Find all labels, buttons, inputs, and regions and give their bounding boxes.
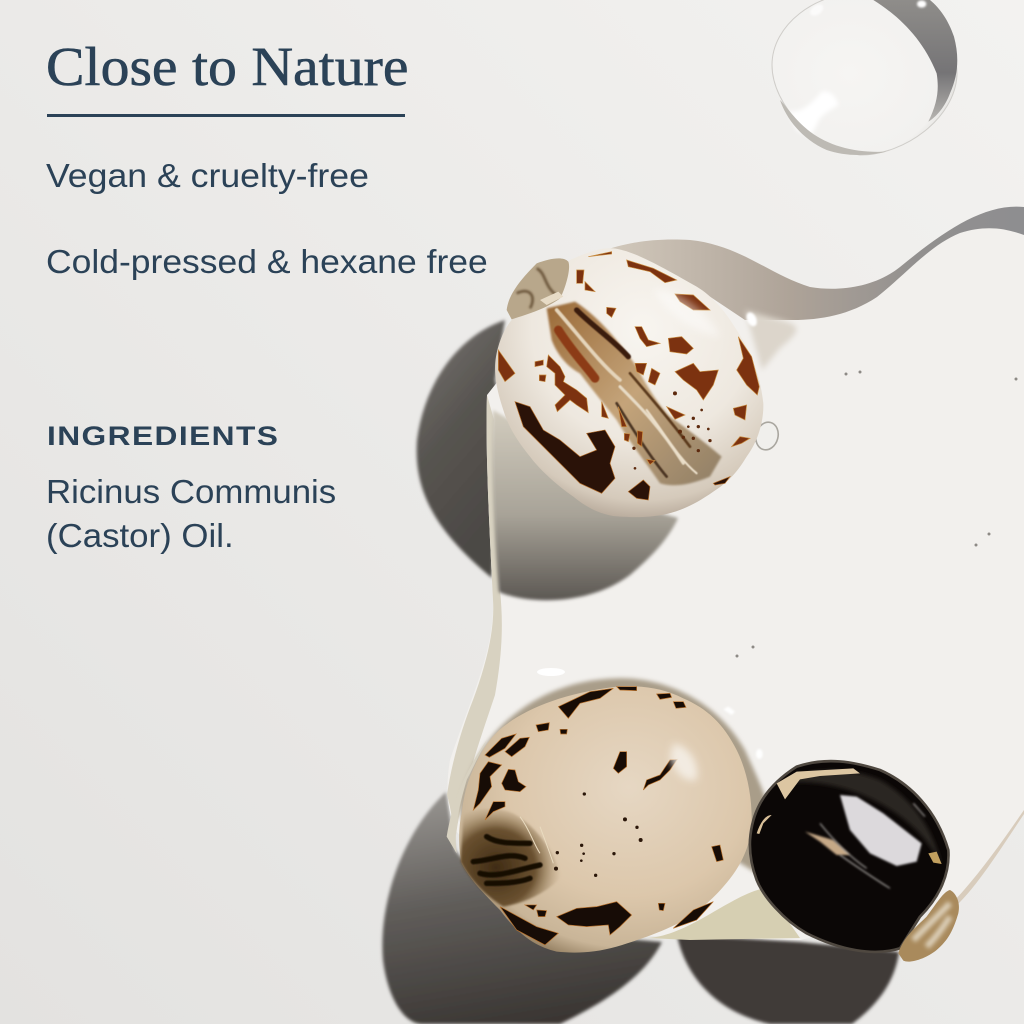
title: Close to Nature (46, 36, 408, 97)
small droplets (537, 370, 1018, 676)
oil pool (447, 207, 1024, 940)
ingredients list: Ricinus Communis (46, 473, 336, 510)
seed: top speckled (495, 248, 763, 517)
ingredients list: (Castor) Oil. (46, 517, 234, 554)
title rule (47, 114, 405, 117)
claim: vegan: Vegan & cruelty-free (46, 157, 369, 194)
ingredients list (46, 473, 336, 554)
ingredients heading: INGREDIENTS (47, 421, 279, 451)
seed: bottom pale (459, 686, 752, 953)
claim: cold-pressed: Cold-pressed & hexane free (46, 243, 488, 280)
seed shadows (382, 320, 899, 1024)
oil droplet top (772, 0, 957, 155)
oil halo: bottom seeds (447, 678, 773, 883)
seed: bottom dark (750, 761, 959, 962)
